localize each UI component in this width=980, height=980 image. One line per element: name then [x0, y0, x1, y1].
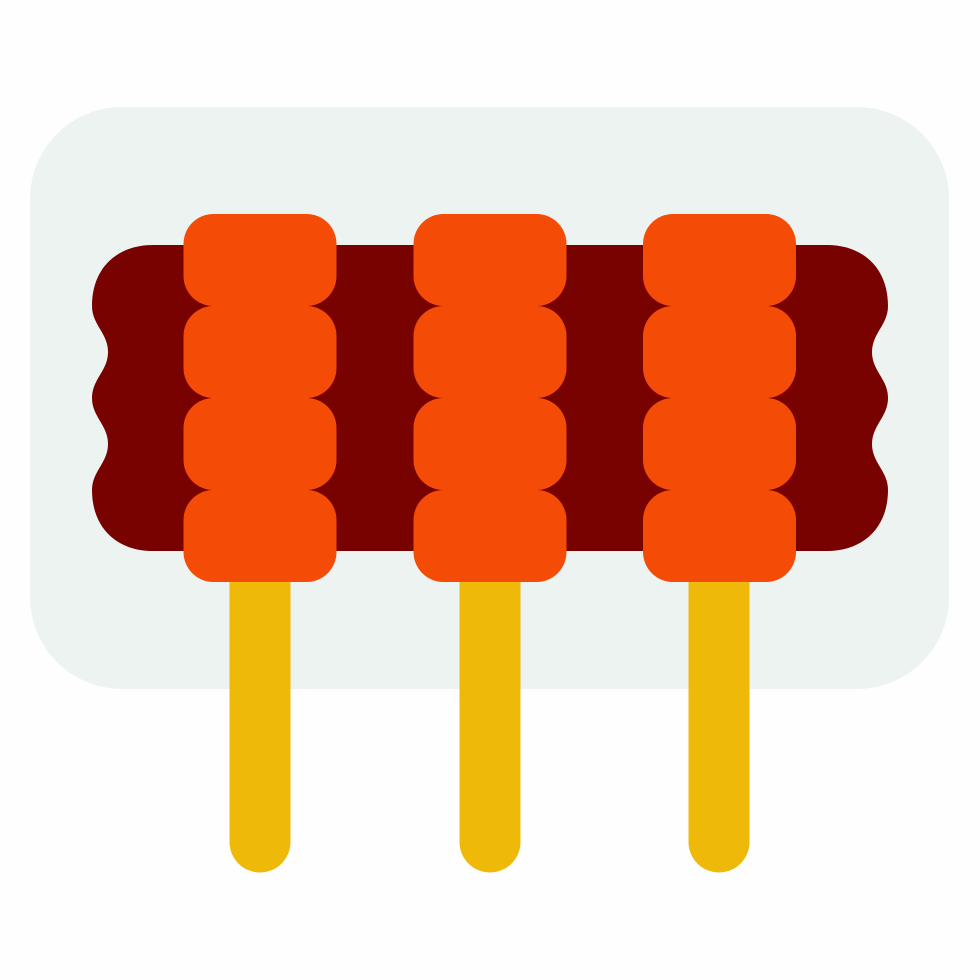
meat pieces 2: [414, 214, 566, 582]
plate: [30, 107, 949, 689]
stick 3: [688, 570, 750, 872]
stick 1: [230, 570, 290, 872]
skewer 3: [643, 214, 796, 872]
meat slab: [92, 245, 888, 551]
meat pieces 1: [184, 214, 336, 582]
stick 2: [460, 570, 520, 872]
skewer 2: [414, 214, 566, 872]
meat pieces 3: [643, 214, 796, 582]
skewer 1: [184, 214, 336, 872]
